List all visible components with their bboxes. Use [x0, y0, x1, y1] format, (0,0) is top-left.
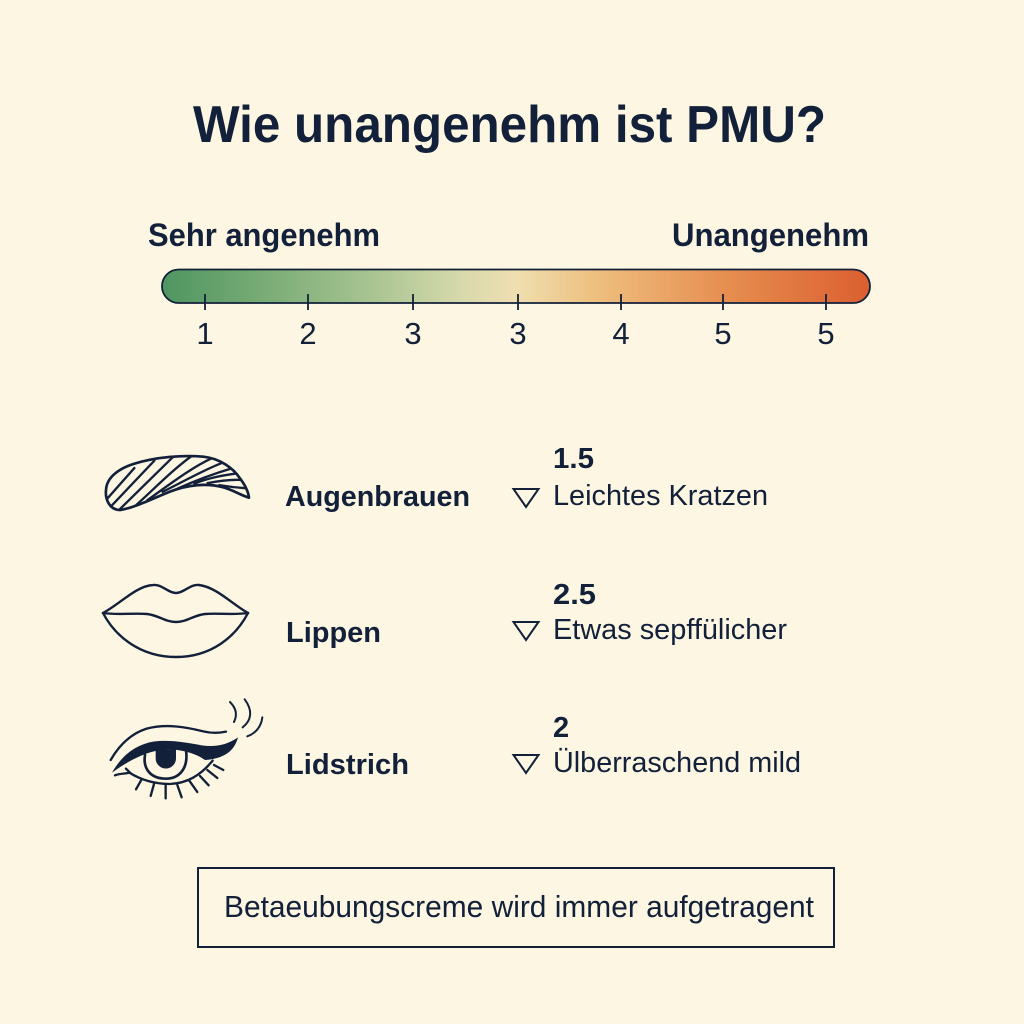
- label: Lidstrich: Lidstrich: [286, 749, 409, 781]
- eyeliner wing: [112, 737, 238, 773]
- rating description: Ülberraschend mild: [553, 747, 801, 779]
- title: Wie unangenehm ist PMU?: [193, 96, 826, 154]
- pain scale: [148, 217, 870, 351]
- callout: numbing cream note: Betaeubungscreme wird immer aufgetragent: [224, 889, 814, 924]
- row: Lippen: [103, 579, 787, 657]
- rating value: 2.5: [553, 579, 596, 611]
- rating value: 1.5: [553, 443, 594, 475]
- rating description: Etwas sepffülicher: [553, 614, 787, 646]
- scale label: left: Sehr angenehm: [148, 217, 380, 253]
- label: Lippen: Lippen: [286, 617, 381, 649]
- rating marker triangle: [514, 622, 538, 640]
- rating value: 2: [553, 712, 569, 744]
- row: Lidstrich: [111, 699, 801, 798]
- gradient bar: [162, 270, 870, 303]
- scale numbers: 4: [612, 316, 630, 351]
- scale numbers: 2: [299, 316, 317, 351]
- rating marker triangle: [514, 755, 538, 773]
- scale ticks: [205, 294, 826, 310]
- icon: eyebrow: [106, 456, 249, 511]
- scale numbers: [196, 316, 835, 351]
- scale numbers: 3: [509, 316, 527, 351]
- scale numbers: 5: [817, 316, 835, 351]
- scale numbers: 5: [714, 316, 732, 351]
- row: Augenbrauen: [106, 443, 768, 513]
- icon: lips: [103, 585, 248, 657]
- rating marker triangle: [514, 489, 538, 507]
- callout: numbing cream note: [198, 868, 834, 947]
- scale numbers: 3: [404, 316, 422, 351]
- rating description: Leichtes Kratzen: [553, 480, 768, 512]
- scale numbers: 1: [196, 316, 214, 351]
- pupil: [156, 749, 176, 768]
- label: Augenbrauen: Augenbrauen: [285, 481, 470, 513]
- icon: eye with eyeliner: [111, 699, 262, 798]
- scale label: right: Unangenehm: [672, 217, 869, 253]
